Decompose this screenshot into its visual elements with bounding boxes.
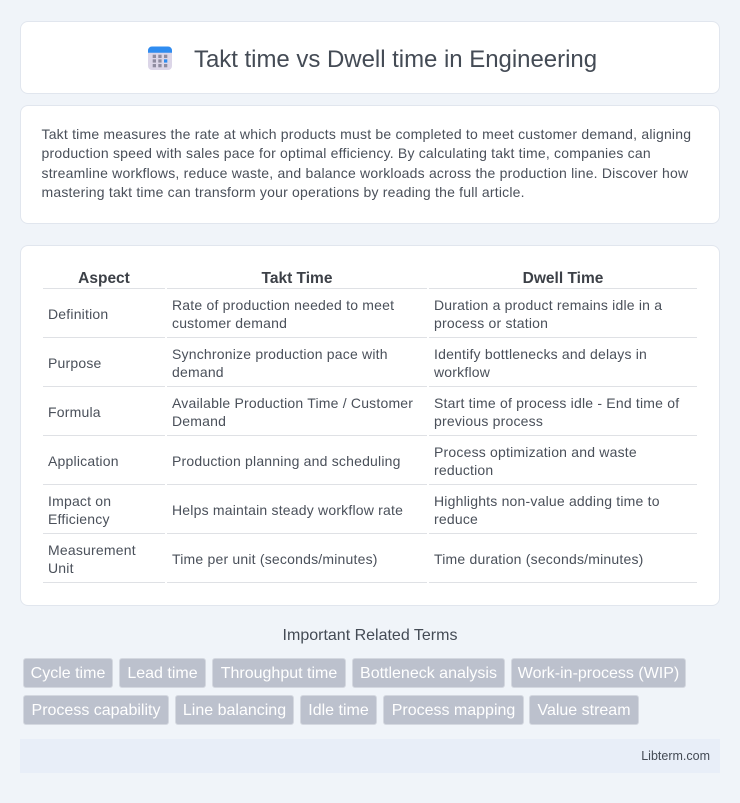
row: Impact on Efficiency: Helps maintain steady workflow rate — [172, 502, 403, 518]
row: Purpose: Synchronize production pace with — [172, 346, 388, 362]
tag: Throughput time: Throughput time — [221, 665, 337, 682]
row: Impact on Efficiency: reduce — [434, 511, 478, 527]
tag: Idle time: Idle time — [308, 702, 369, 719]
row: Application: Process optimization and waste — [434, 444, 637, 460]
row: Formula: previous process — [434, 413, 543, 429]
row: Formula: Formula — [48, 404, 101, 420]
row: Application — [48, 444, 637, 478]
row: Definition: customer demand — [172, 315, 287, 331]
tag: Lead time — [119, 658, 206, 688]
tag: Bottleneck analysis: Bottleneck analysis — [360, 665, 497, 682]
footer bar — [20, 739, 720, 773]
tag: Process capability — [23, 695, 169, 725]
row: Impact on Efficiency: Impact on — [48, 493, 111, 509]
tag: Throughput time — [212, 658, 346, 688]
row: Measurement Unit: Time per unit (seconds/minutes) — [172, 551, 378, 567]
row: Formula: Demand — [172, 413, 226, 429]
comparison table — [43, 269, 697, 584]
tag: Bottleneck analysis — [352, 658, 505, 688]
row: Purpose: Identify bottlenecks and delays in — [434, 346, 647, 362]
column header: Takt Time: Takt Time — [262, 270, 332, 287]
panel: intro text — [20, 105, 720, 224]
title: Takt time vs Dwell time in Engineering — [194, 46, 597, 73]
tag: Value stream — [529, 695, 639, 725]
row: Measurement Unit: Time duration (seconds/minutes) — [434, 551, 644, 567]
panel: comparison table — [20, 245, 720, 606]
heading: Important Related Terms: Important Related Terms — [283, 627, 457, 644]
tag: Line balancing: Line balancing — [183, 702, 286, 719]
row: Formula — [48, 395, 680, 429]
row: Formula: Available Production Time / Customer — [172, 395, 413, 411]
tag: Process capability: Process capability — [32, 702, 160, 719]
row: Purpose — [48, 346, 647, 380]
intro paragraph: production speed with sales pace for optimal efficiency. By calculating takt time, companies can — [42, 145, 651, 161]
footer credit: Libterm.com — [641, 749, 710, 763]
tag: Idle time — [300, 695, 377, 725]
tag list — [23, 658, 686, 725]
row: Impact on Efficiency — [48, 493, 660, 527]
tag: Process mapping — [383, 695, 524, 725]
intro paragraph: streamline workflows, reduce waste, and balance workloads across the production line. Discover how — [42, 165, 688, 181]
row: Measurement Unit: Unit — [48, 560, 74, 576]
intro paragraph: mastering takt time can transform your operations by reading the full article. — [42, 184, 525, 200]
intro paragraph: Takt time measures the rate at which products must be completed to meet customer demand, aligning — [42, 126, 691, 142]
row: Impact on Efficiency: Efficiency — [48, 511, 110, 527]
row: Purpose: Purpose — [48, 355, 102, 371]
row: Application: Production planning and scheduling — [172, 453, 401, 469]
row: Impact on Efficiency: Highlights non-value adding time to — [434, 493, 660, 509]
row: Application: Application — [48, 453, 119, 469]
tag: Work-in-process (WIP) — [511, 658, 686, 688]
tag: Process mapping: Process mapping — [392, 702, 515, 719]
tag: Cycle time — [23, 658, 113, 688]
tag: Cycle time: Cycle time — [31, 665, 105, 682]
row: Definition: Rate of production needed to meet — [172, 297, 394, 313]
column header: Dwell Time: Dwell Time — [523, 270, 603, 287]
row: Measurement Unit — [48, 542, 644, 576]
tag: Value stream: Value stream — [537, 702, 631, 719]
row: Purpose: demand — [172, 364, 224, 380]
column header: Aspect: Aspect — [78, 270, 130, 287]
header panel — [20, 21, 720, 94]
row: Formula: Start time of process idle - End time of — [434, 395, 679, 411]
row: Measurement Unit: Measurement — [48, 542, 136, 558]
tag: Lead time: Lead time — [127, 665, 198, 682]
row: Definition: process or station — [434, 315, 548, 331]
row: Definition — [48, 297, 662, 331]
row: Purpose: workflow — [434, 364, 490, 380]
row: Definition: Definition — [48, 306, 108, 322]
tag: Work-in-process (WIP): Work-in-process (WIP) — [518, 665, 679, 682]
tag: Line balancing — [175, 695, 294, 725]
row: Application: reduction — [434, 462, 493, 478]
icon: calendar — [148, 46, 172, 70]
intro paragraph — [42, 126, 691, 200]
row: Definition: Duration a product remains idle in a — [434, 297, 662, 313]
